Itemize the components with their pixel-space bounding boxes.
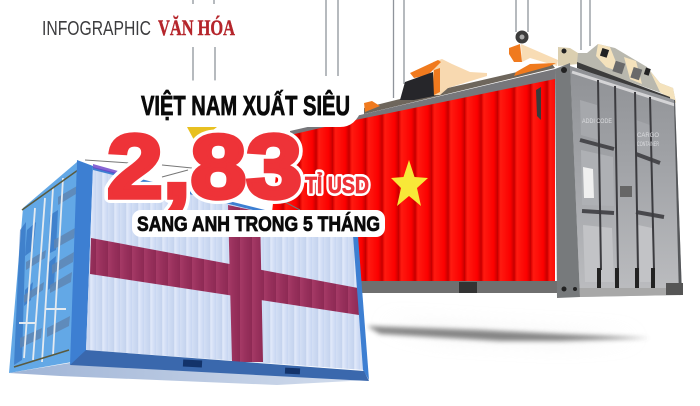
door panel [570, 66, 682, 297]
door details [572, 72, 686, 298]
star [391, 160, 428, 206]
yellow hazard detail behind number [187, 127, 217, 140]
flag side white [86, 170, 364, 370]
door bars [24, 178, 63, 362]
door lettering: CARGO [637, 132, 659, 139]
door lettering: ADDI CODE [582, 118, 613, 125]
top yellow striped beam [558, 44, 676, 103]
key figure: 2,83 [107, 118, 302, 218]
door bands [20, 186, 77, 348]
blue bottom rail [70, 350, 369, 381]
label: Văn Hóa: VĂN HÓA [158, 15, 235, 40]
dark spreader rail [364, 64, 555, 114]
blue frame right [353, 235, 369, 380]
corner post [555, 63, 580, 298]
underside [9, 363, 369, 385]
unit label: TỈ USD [305, 170, 369, 198]
headline text: VIỆT NAM XUẤT SIÊU [141, 90, 350, 121]
subheading text: SANG ANH TRONG 5 THÁNG [137, 211, 380, 236]
blue top rail [93, 167, 353, 235]
bottom right corner [666, 283, 683, 295]
blue corner post [70, 160, 93, 365]
masthead [42, 15, 235, 40]
red container: Vietnam flag [265, 30, 558, 293]
top rail [290, 69, 555, 135]
cross horizontal band [90, 238, 359, 315]
door panel shading [14, 210, 58, 365]
subheading pill [132, 210, 385, 237]
ground shadow [367, 322, 650, 342]
cross vertical band [228, 205, 263, 362]
red side wall [265, 76, 555, 281]
sling wires [85, 160, 300, 210]
blue container: England flag [9, 160, 369, 385]
door lettering [582, 118, 659, 148]
bottom rail [270, 281, 557, 293]
pulley wheel [516, 30, 528, 44]
crane cables [193, 0, 590, 98]
door lettering: CONTAINER [637, 141, 659, 148]
key figure: 2,83 [107, 118, 302, 218]
latch [536, 87, 541, 120]
spreader bar on red container [364, 30, 558, 114]
headline pill [126, 80, 362, 127]
forklift pocket [459, 282, 477, 293]
label: infographic: INFOGRAPHIC [42, 18, 151, 40]
grey container doors [555, 44, 686, 298]
unit label: TỈ USD [305, 170, 369, 198]
door side [9, 162, 77, 373]
